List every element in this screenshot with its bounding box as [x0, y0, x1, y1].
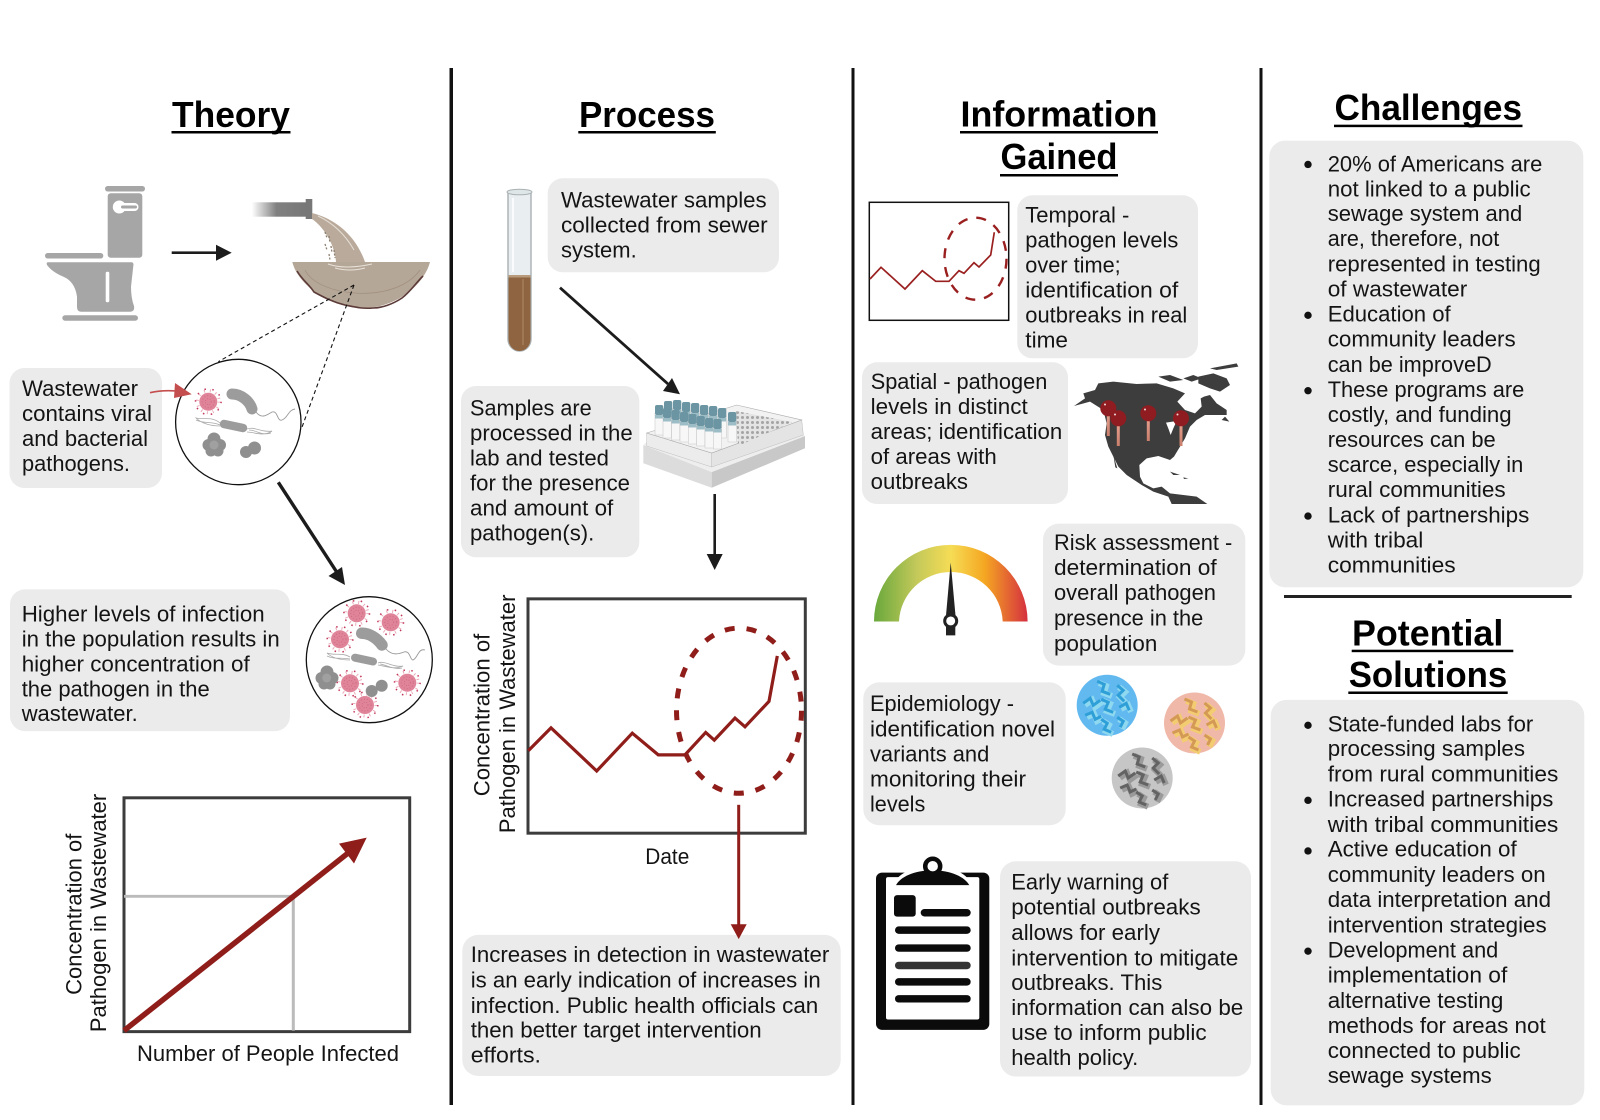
list box: solutions: connected to public — [1328, 1038, 1521, 1063]
text block: early warning — [1000, 861, 1251, 1077]
text block: samples collected: Wastewater samples — [561, 187, 767, 212]
text block: higher infection levels: in the population results in — [22, 627, 280, 652]
arrow: tube to lab plate — [560, 288, 680, 394]
axis label: y second line: Pathogen in Wastewater — [495, 595, 520, 833]
text block: early indication: Increases in detection in wastewater — [471, 942, 829, 967]
icon: orange virus variant — [1164, 692, 1225, 754]
arrow: toilet to pipe — [172, 245, 232, 261]
text block: higher infection levels — [10, 589, 290, 731]
text block: early warning: Early warning of — [1011, 869, 1169, 894]
list box: challenges: resources can be — [1328, 427, 1496, 452]
text block: early indication — [462, 935, 841, 1076]
text block: early warning: health policy. — [1011, 1045, 1138, 1070]
text block: temporal — [1017, 195, 1198, 358]
text block: higher infection levels: wastewater. — [21, 701, 138, 726]
list box: solutions: Active education of — [1328, 837, 1518, 862]
magnified circle: high pathogen levels — [306, 597, 432, 723]
list box: challenges: can be improveD — [1328, 352, 1492, 377]
text block: higher infection levels: higher concentration of — [22, 651, 251, 676]
list box: challenges: costly, and funding — [1328, 402, 1512, 427]
heading: Theory: Theory — [172, 94, 290, 135]
icon: test tube with sample — [507, 189, 532, 351]
list box: solutions: Development and — [1328, 938, 1498, 963]
magnified circle: low pathogen levels — [176, 359, 301, 485]
text block: early warning: use to inform public — [1011, 1020, 1207, 1045]
list box: challenges: scarce, especially in — [1328, 452, 1523, 477]
text block: epidemiology: variants and — [870, 741, 989, 766]
list box: challenges: sewage system and — [1328, 201, 1522, 226]
panel: process — [461, 94, 841, 1076]
heading: Information Gained: Gained — [1000, 136, 1118, 177]
text block: spatial: levels in distinct — [871, 394, 1028, 419]
arrow: outbreak to conclusion — [731, 805, 747, 939]
text block: spatial: of areas with — [871, 444, 997, 469]
list box: challenges: These programs are — [1328, 377, 1524, 402]
heading: Potential Solutions: Potential — [1352, 613, 1503, 654]
column divider: process and information — [852, 68, 854, 1105]
text block: temporal: identification of — [1025, 277, 1179, 302]
text block: risk assessment: population — [1054, 631, 1157, 656]
text block: epidemiology: levels — [870, 792, 925, 816]
column divider: information and challenges — [1260, 68, 1262, 1105]
text block: risk assessment: Risk assessment - — [1054, 530, 1232, 555]
list box: solutions: data interpretation and — [1328, 887, 1551, 912]
text block: wastewater contains pathogens: contains viral — [22, 401, 152, 426]
arrow: text to virus — [150, 383, 192, 398]
text block: temporal: over time; — [1025, 252, 1121, 277]
text block: temporal: time — [1025, 327, 1068, 352]
axis label: x: Date — [645, 844, 689, 869]
text block: lab processing: for the presence — [470, 470, 630, 495]
text block: temporal: outbreaks in real — [1025, 302, 1187, 327]
axis label: y: Concentration of — [469, 633, 494, 796]
list box: challenges: are, therefore, not — [1328, 226, 1499, 251]
arrow: to higher concentration — [278, 482, 345, 585]
icon: sample rack with vials — [643, 400, 805, 488]
column divider: theory and process — [450, 68, 453, 1105]
icon: blue virus variant — [1077, 675, 1138, 736]
list box: solutions: community leaders on — [1328, 862, 1546, 887]
list box: challenges: community leaders — [1328, 327, 1516, 352]
text block: lab processing: processed in the — [470, 420, 633, 445]
list box: solutions: with tribal communities — [1327, 812, 1558, 837]
text block: samples collected — [548, 178, 779, 272]
heading: Information Gained: Information — [960, 94, 1158, 135]
icon: map of North America with pins — [1074, 363, 1238, 504]
heading: Potential Solutions: Solutions — [1349, 654, 1507, 695]
text block: early indication: infection. Public health officials can — [471, 993, 818, 1018]
text block: lab processing: Samples are — [470, 395, 592, 420]
list box: challenges: Education of — [1328, 302, 1452, 327]
text block: early warning: outbreaks. This — [1011, 970, 1162, 995]
text block: epidemiology — [863, 682, 1066, 825]
text block: samples collected: collected from sewer — [561, 212, 768, 237]
text block: temporal: pathogen levels — [1025, 227, 1178, 252]
text block: early warning: information can also be — [1011, 995, 1243, 1020]
text block: lab processing: and amount of — [470, 495, 614, 520]
text block: risk assessment: overall pathogen — [1054, 580, 1216, 605]
list box: challenges — [1269, 141, 1583, 587]
list box: solutions — [1271, 700, 1584, 1105]
chart: concentration versus people infected — [62, 794, 410, 1066]
dashed zoom lines from basin to magnified circle — [218, 285, 354, 428]
axis label: x: Number of People Infected — [137, 1041, 399, 1066]
arrow: lab plate to chart — [707, 494, 723, 570]
panel: information gained — [862, 94, 1251, 1077]
text block: wastewater contains pathogens: pathogens. — [22, 451, 130, 476]
text block: epidemiology: monitoring their — [870, 767, 1026, 792]
text block: early indication: then better target intervention — [471, 1018, 762, 1043]
text block: lab processing — [461, 386, 639, 557]
list box: challenges: of wastewater — [1328, 276, 1467, 301]
chart: concentration over time with outbreak — [469, 595, 805, 869]
list box: challenges: not linked to a public — [1328, 176, 1531, 201]
text block: epidemiology: Epidemiology - — [870, 691, 1014, 716]
icon: pipe discharging into basin — [252, 199, 430, 308]
text block: spatial — [862, 362, 1068, 504]
text block: risk assessment — [1043, 524, 1245, 666]
text block: temporal: Temporal - — [1025, 202, 1129, 227]
text block: early indication: efforts. — [471, 1043, 541, 1068]
axis label: y: Concentration of — [62, 833, 87, 995]
list box: solutions: State-funded labs for — [1328, 711, 1533, 736]
list box: solutions: processing samples — [1328, 736, 1525, 761]
text block: wastewater contains pathogens — [10, 368, 162, 488]
list box: solutions: Increased partnerships — [1328, 787, 1553, 812]
text block: samples collected: system. — [561, 237, 637, 262]
text block: lab processing: pathogen(s). — [470, 520, 594, 545]
text block: early warning: intervention to mitigate — [1011, 945, 1238, 970]
text block: wastewater contains pathogens: and bacterial — [22, 426, 148, 451]
text block: higher infection levels: Higher levels of infection — [22, 601, 265, 626]
heading: Information Gained — [960, 94, 1158, 177]
list box: solutions: methods for areas not — [1328, 1013, 1546, 1038]
list box: solutions: from rural communities — [1328, 762, 1558, 787]
text block: risk assessment: presence in the — [1054, 605, 1203, 630]
list box: challenges: communities — [1328, 552, 1456, 577]
text block: higher infection levels: the pathogen in the — [22, 676, 210, 701]
divider: challenges and solutions — [1284, 595, 1572, 598]
text block: spatial: Spatial - pathogen — [871, 369, 1047, 394]
panel: challenges — [1269, 87, 1583, 587]
text block: lab processing: lab and tested — [470, 445, 609, 470]
panel: theory — [10, 94, 432, 1066]
list box: challenges: rural communities — [1328, 477, 1506, 502]
list box: challenges: Lack of partnerships — [1328, 503, 1529, 527]
list box: challenges: represented in testing — [1328, 251, 1541, 276]
text block: spatial: outbreaks — [871, 469, 968, 494]
icon: risk gauge — [874, 545, 1028, 635]
panel: potential solutions — [1271, 613, 1584, 1105]
list box: solutions: implementation of — [1328, 963, 1508, 988]
text block: epidemiology: identification novel — [870, 717, 1055, 741]
heading: Process: Process — [579, 94, 715, 135]
text block: early indication: is an early indication of increases in — [471, 968, 821, 992]
icon: toilet — [45, 186, 145, 321]
text block: wastewater contains pathogens: Wastewater — [22, 376, 138, 401]
heading: Challenges: Challenges — [1334, 87, 1522, 128]
text block: early warning: potential outbreaks — [1011, 895, 1201, 920]
text block: risk assessment: determination of — [1054, 555, 1218, 580]
list box: challenges: 20% of Americans are — [1328, 151, 1542, 176]
text block: spatial: areas; identification — [871, 419, 1062, 444]
axis label: y second line: Pathogen in Wastewater — [86, 794, 111, 1032]
icon: clipboard — [876, 859, 989, 1030]
list box: solutions: sewage systems — [1328, 1063, 1492, 1088]
text block: early warning: allows for early — [1011, 920, 1160, 945]
list box: solutions: alternative testing — [1328, 988, 1503, 1013]
list box: challenges: with tribal — [1327, 528, 1423, 553]
heading: Potential Solutions — [1348, 613, 1513, 695]
icon: grey virus variant — [1112, 748, 1173, 808]
chart: temporal small line chart — [869, 202, 1009, 320]
list box: solutions: intervention strategies — [1328, 912, 1547, 937]
